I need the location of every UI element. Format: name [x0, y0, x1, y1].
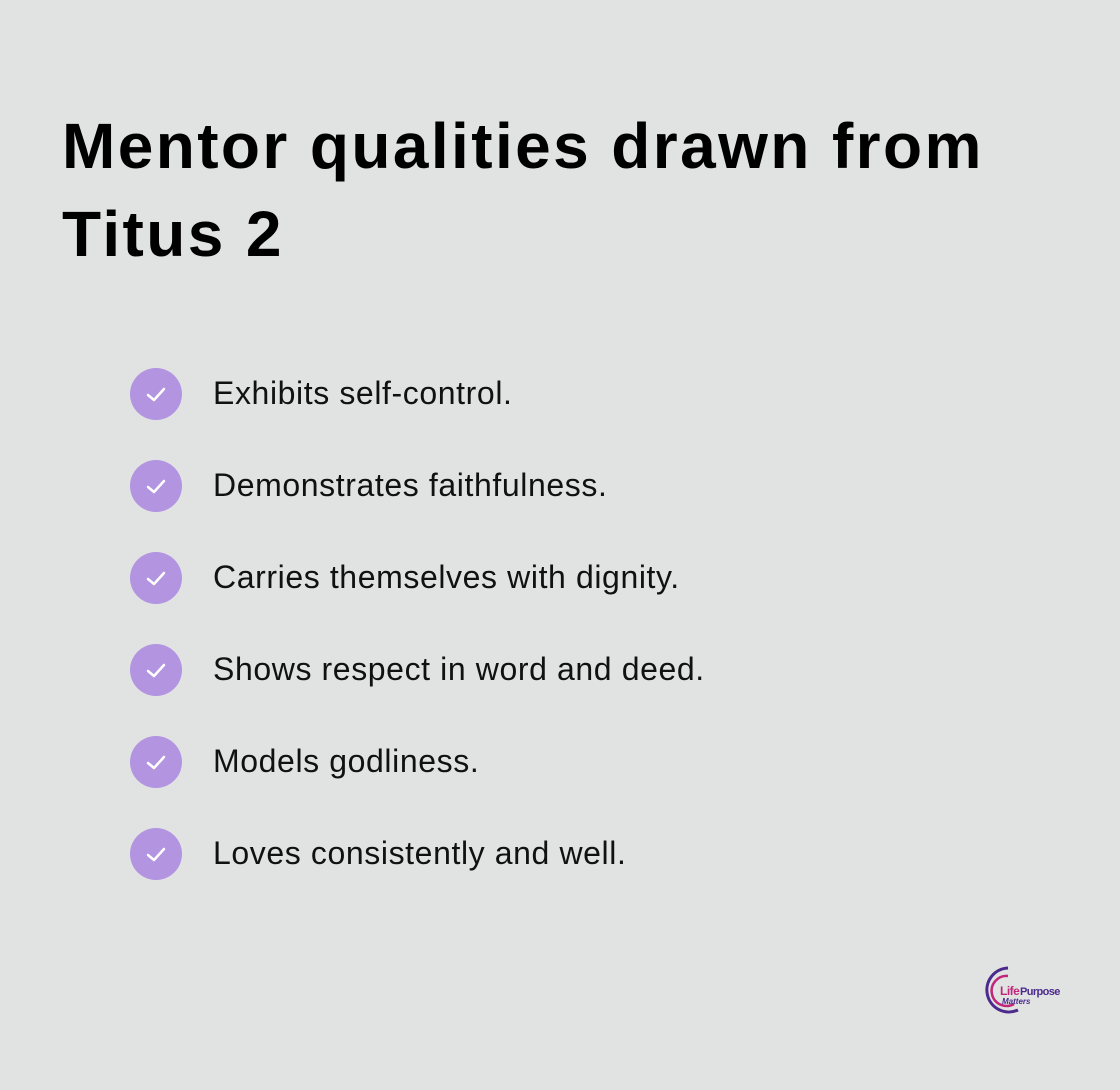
list item 1: Exhibits self-control. — [213, 375, 513, 411]
list item 4: Shows respect in word and deed. — [213, 651, 705, 687]
logo — [985, 966, 1060, 1014]
logo: Life — [1000, 984, 1020, 998]
logo: Matters — [1002, 997, 1031, 1006]
list item 6 — [130, 828, 626, 880]
logo: Purpose — [1020, 986, 1060, 998]
list item 5 — [130, 736, 479, 788]
list item 5: Models godliness. — [213, 743, 479, 779]
list item 4 — [130, 644, 705, 696]
list item 3 — [130, 552, 680, 604]
title: Titus 2 — [62, 198, 284, 270]
title — [62, 110, 984, 270]
list item 3: Carries themselves with dignity. — [213, 559, 680, 595]
list item 6: Loves consistently and well. — [213, 835, 626, 871]
list item 2 — [130, 460, 607, 512]
list item 1 — [130, 368, 513, 420]
list item 2: Demonstrates faithfulness. — [213, 467, 607, 503]
title: Mentor qualities drawn from — [62, 110, 984, 182]
